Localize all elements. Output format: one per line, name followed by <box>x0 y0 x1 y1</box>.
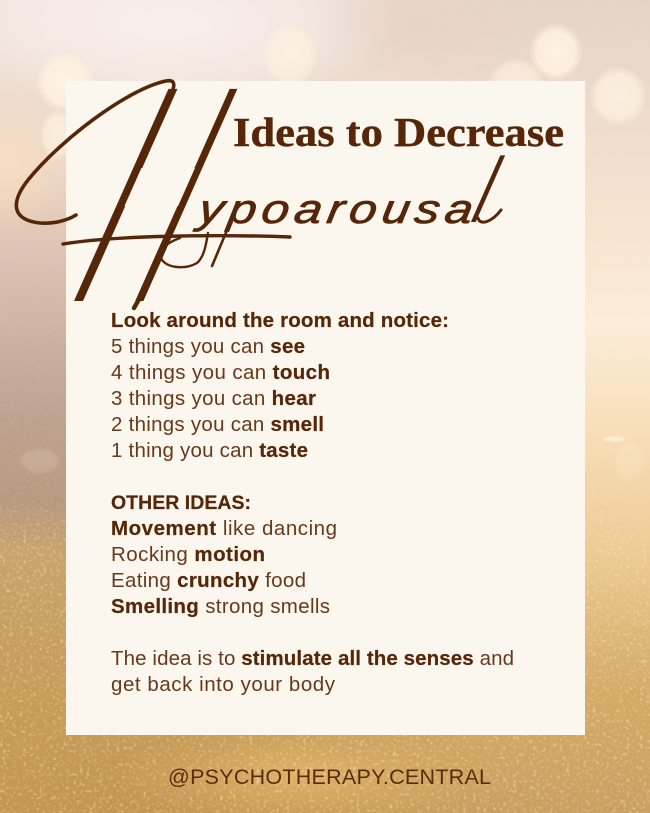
text block: closing note <box>111 647 514 696</box>
line: Movement like dancing <box>111 517 337 540</box>
line: Look around the room and notice: <box>111 309 449 332</box>
panel: main content card <box>66 81 585 735</box>
big script capital H: H <box>29 16 283 374</box>
line: OTHER IDEAS: <box>111 492 251 514</box>
footer handle: @PSYCHOTHERAPY.CENTRAL <box>168 765 491 789</box>
heading: Hypoarousal <box>16 16 511 374</box>
line: Smelling strong smells <box>111 595 330 618</box>
line: 2 things you can smell <box>111 413 324 436</box>
line: Rocking motion <box>111 543 265 566</box>
text block: grounding list <box>111 309 449 462</box>
heading: Hypoarousal: l <box>464 139 511 242</box>
text block: other ideas <box>111 492 337 618</box>
line: 4 things you can touch <box>111 361 330 384</box>
line: 1 thing you can taste <box>111 439 308 462</box>
line: The idea is to stimulate all the senses and <box>111 647 514 670</box>
line: 5 things you can see <box>111 335 305 358</box>
line: 3 things you can hear <box>111 387 316 410</box>
line: get back into your body <box>111 673 336 696</box>
script lowercase letters: ypoarousa <box>192 186 477 232</box>
heading: Ideas to Decrease: Ideas to Decrease <box>233 109 564 155</box>
line: Eating crunchy food <box>111 569 306 592</box>
